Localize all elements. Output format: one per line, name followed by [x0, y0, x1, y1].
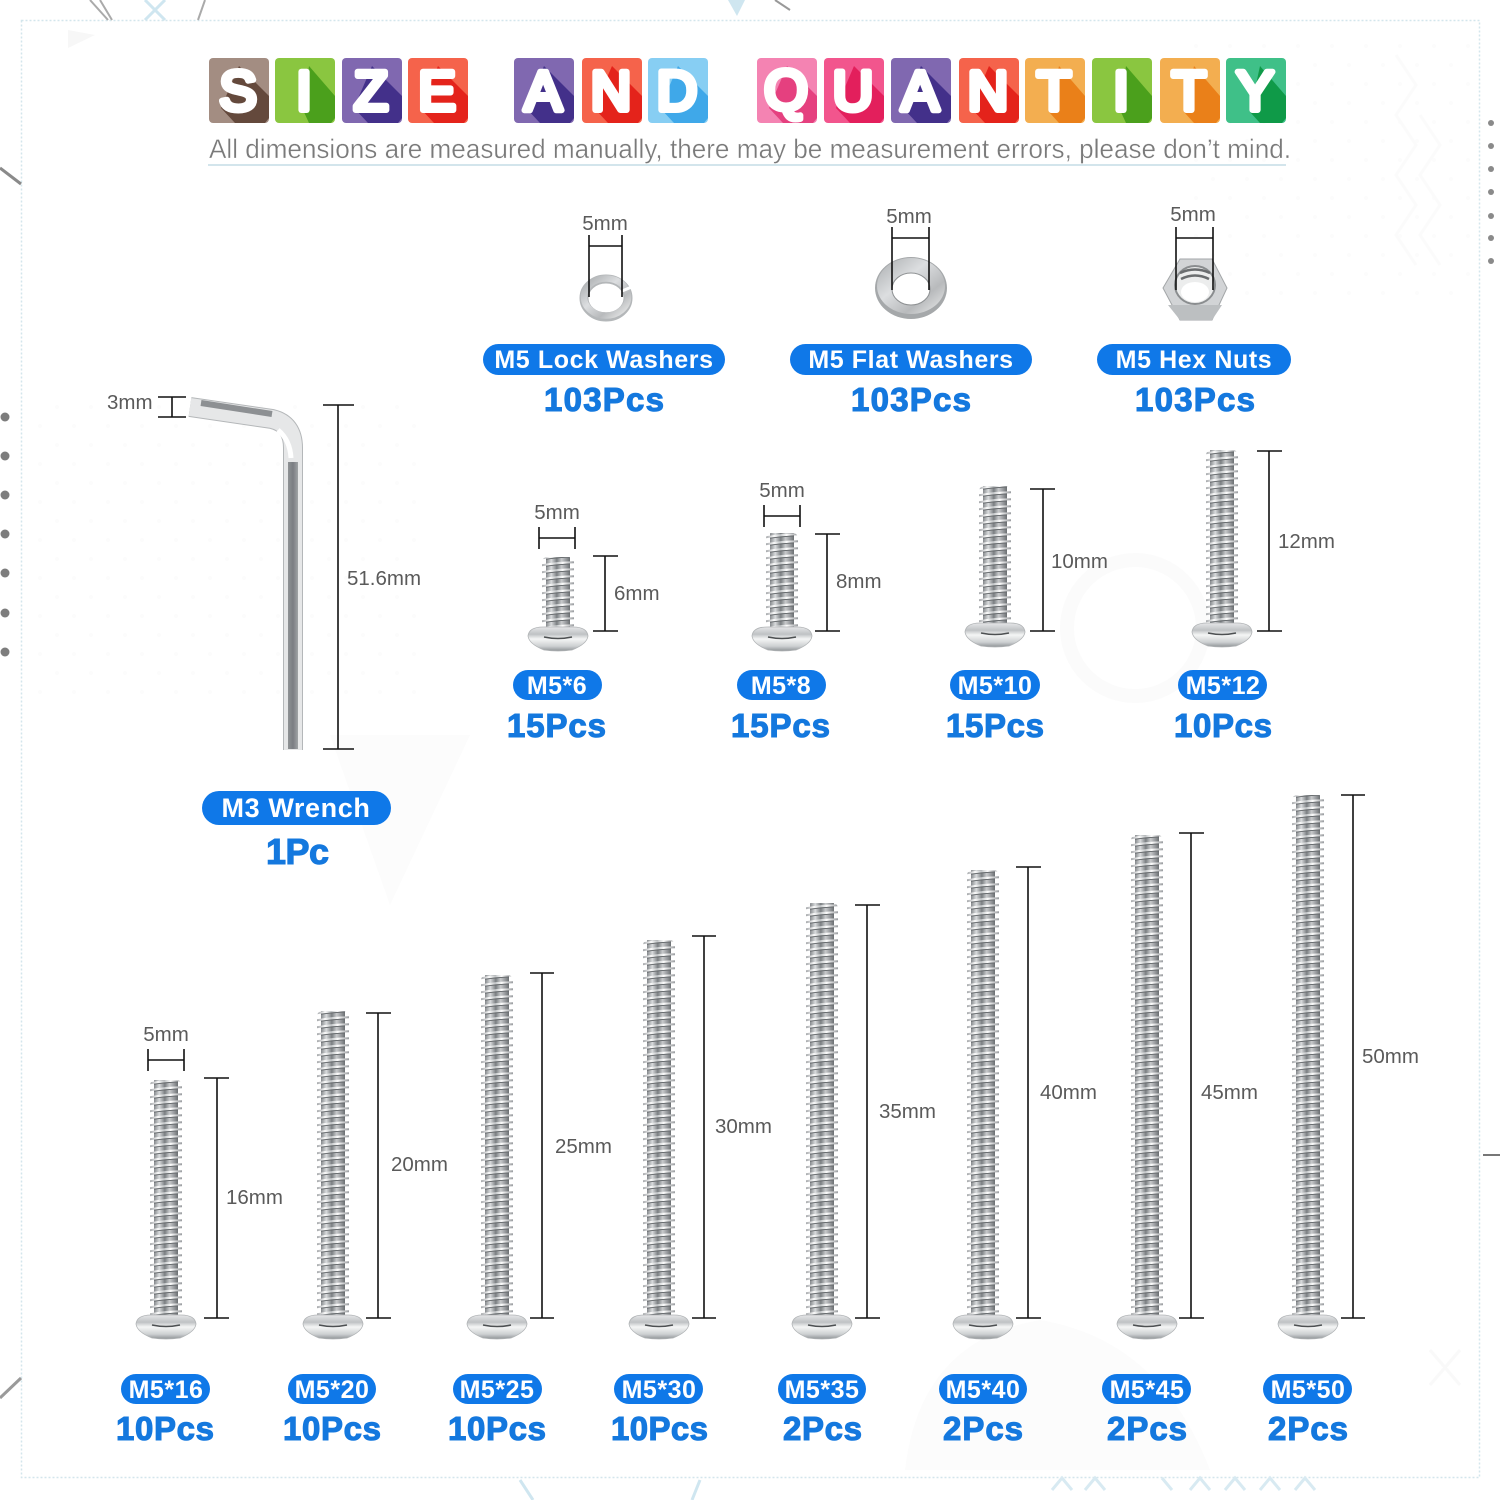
- subtitle note: All dimensions are measured manually, there may be measurement errors, please don’t mind.: [209, 134, 1291, 164]
- dimension: 6mm: [593, 556, 660, 631]
- label pill: M3 Wrench: [222, 793, 370, 823]
- dimension: 35mm: 35mm: [879, 1100, 936, 1123]
- dimension: 30mm: 30mm: [715, 1115, 772, 1138]
- quantity: 10Pcs: [116, 1410, 214, 1447]
- quantity: 15Pcs: [946, 707, 1044, 744]
- dimension: 16mm: 16mm: [226, 1186, 283, 1209]
- dimension: 5mm: [1170, 203, 1216, 290]
- dimension: 20mm: 20mm: [391, 1153, 448, 1176]
- label pill: M5*20: [295, 1376, 369, 1404]
- label pill: M5*50: [1271, 1376, 1345, 1404]
- tile: Z: [342, 58, 402, 123]
- panel: M5*45: [1102, 833, 1258, 1447]
- tile: Q: Q: [764, 58, 808, 121]
- dimension: 5mm width: 5mm: [534, 501, 580, 524]
- label pill: M5*40: [946, 1376, 1020, 1404]
- panel: M5*30: [611, 936, 772, 1447]
- label pill: M5*45: [1110, 1376, 1184, 1404]
- panel: M5*20: [283, 1011, 448, 1447]
- screw: [629, 940, 689, 1339]
- dimension: 35mm: [855, 905, 936, 1318]
- screw: [752, 533, 812, 651]
- icon: hex wrench: [190, 403, 298, 750]
- label pill: M5*30: [622, 1376, 696, 1404]
- screw: [467, 975, 527, 1339]
- panel: M5 flat washers: [790, 205, 1032, 418]
- panel: M5*6: [507, 501, 660, 744]
- tile: U: [824, 58, 884, 123]
- panel: M3 wrench: [107, 391, 421, 872]
- tile: T: [1025, 58, 1085, 123]
- dimension: 10mm: 10mm: [1051, 550, 1108, 573]
- quantity: 2Pcs: [1107, 1410, 1187, 1447]
- tile: I: I: [1113, 59, 1129, 122]
- tile: Y: [1226, 58, 1286, 123]
- tile: S: [209, 58, 269, 123]
- dimension: 12mm: [1257, 451, 1335, 631]
- screw: [1192, 450, 1252, 647]
- dimension: 3mm: 3mm: [107, 391, 153, 414]
- dimension: 40mm: [1016, 867, 1097, 1318]
- tile: I: I: [296, 59, 312, 122]
- quantity: 10Pcs: [448, 1410, 546, 1447]
- dimension: 50mm: [1341, 795, 1419, 1318]
- dimension: 5mm: 5mm: [886, 205, 932, 228]
- tile: D: [648, 58, 708, 123]
- tile: Z: Z: [354, 59, 388, 122]
- screw: [1278, 795, 1338, 1339]
- label pill: [513, 670, 602, 700]
- dimension: 5mm: [582, 212, 628, 297]
- tile: D: D: [657, 59, 697, 122]
- tile: Y: Y: [1236, 59, 1274, 122]
- dimension: 5mm: 5mm: [1170, 203, 1216, 226]
- tile: E: [408, 58, 468, 123]
- dimension: 5mm width: 5mm: [143, 1023, 189, 1046]
- icon: hex nut: [1163, 259, 1227, 320]
- panel: M5*40: [939, 867, 1097, 1447]
- quantity: 2Pcs: [943, 1410, 1023, 1447]
- quantity: 2Pcs: [783, 1410, 862, 1447]
- dimension: 5mm: [886, 205, 932, 290]
- dimension: 30mm: [692, 936, 772, 1318]
- tile: A: [891, 58, 951, 123]
- dimension: 51.6mm: 51.6mm: [347, 567, 421, 590]
- label pill: M5*12: [1186, 672, 1260, 700]
- panel: M5*8: [731, 479, 882, 744]
- dimension: 10mm: [1030, 489, 1108, 631]
- panel: M5 lock washers: [483, 212, 725, 418]
- quantity: 10Pcs: [283, 1410, 381, 1447]
- dimension: 8mm: [815, 534, 882, 631]
- quantity: 103Pcs: [851, 381, 971, 418]
- tile: A: A: [901, 59, 939, 122]
- quantity: 15Pcs: [731, 707, 830, 744]
- dimension: 45mm: [1179, 833, 1258, 1318]
- tile: E: E: [418, 59, 456, 122]
- quantity: 1Pc: [266, 831, 329, 872]
- label pill: M5*25: [460, 1376, 534, 1404]
- panel: M5*50: [1263, 795, 1419, 1447]
- dimension: 50mm: 50mm: [1362, 1045, 1419, 1068]
- tile: A: A: [524, 59, 562, 122]
- title: SIZE AND QUANTITY: [209, 58, 1286, 123]
- tile: T: T: [1172, 59, 1206, 122]
- label pill: M5 Hex Nuts: [1116, 346, 1272, 374]
- screw: [1117, 835, 1177, 1339]
- panel: M5*12: [1174, 450, 1335, 744]
- dimension: 51.6mm: [323, 405, 421, 749]
- dimension: 25mm: 25mm: [555, 1135, 612, 1158]
- dimension: 3mm: [107, 391, 186, 417]
- screw: [965, 486, 1025, 647]
- dimension: 16mm: [204, 1078, 283, 1318]
- panel: M5*35: [778, 903, 936, 1447]
- quantity: 10Pcs: [1174, 707, 1272, 744]
- dimension: 45mm: 45mm: [1201, 1081, 1258, 1104]
- tile: N: [582, 58, 642, 123]
- label pill: M5*6: [527, 672, 587, 700]
- label pill: M5*8: [751, 672, 811, 700]
- dimension: 6mm: 6mm: [614, 582, 660, 605]
- quantity: 10Pcs: [611, 1410, 708, 1447]
- dimension: 20mm: [366, 1013, 448, 1318]
- tile: I: [1092, 58, 1152, 123]
- label pill: M5 Flat Washers: [808, 346, 1014, 374]
- tile: S: S: [219, 59, 257, 122]
- label pill: M5*10: [958, 672, 1032, 700]
- quantity: 103Pcs: [1135, 381, 1255, 418]
- panel: M5*16: [116, 1023, 283, 1447]
- quantity: 2Pcs: [1268, 1410, 1348, 1447]
- dimension: 5mm: 5mm: [582, 212, 628, 235]
- dimension: 5mm width: [534, 501, 580, 549]
- tile: T: T: [1037, 59, 1071, 122]
- dimension: 5mm width: 5mm: [759, 479, 805, 502]
- quantity: 103Pcs: [544, 381, 664, 418]
- dimension: 8mm: 8mm: [836, 570, 882, 593]
- label pill: M5 Lock Washers: [494, 346, 714, 374]
- screw: [303, 1011, 363, 1339]
- label pill: M5*35: [785, 1376, 859, 1404]
- tile: N: [959, 58, 1019, 123]
- dimension: 25mm: [530, 973, 612, 1318]
- quantity: 15Pcs: [507, 707, 606, 744]
- tile: U: U: [833, 59, 873, 122]
- dimension: 12mm: 12mm: [1278, 530, 1335, 553]
- screw: [792, 903, 852, 1339]
- screw: [528, 557, 588, 651]
- screw: [953, 870, 1013, 1339]
- label pill: [737, 670, 826, 700]
- icon: flat washer: [875, 257, 947, 319]
- screw: [136, 1080, 196, 1339]
- panel: M5*25: [448, 973, 612, 1447]
- panel: M5 hex nuts: [1097, 203, 1291, 418]
- panel: M5*10: [946, 486, 1108, 744]
- dimension: 5mm width: [143, 1023, 189, 1071]
- tile: T: [1160, 58, 1220, 123]
- tile: N: N: [968, 59, 1008, 122]
- dimension: 40mm: 40mm: [1040, 1081, 1097, 1104]
- label pill: M5*16: [129, 1376, 203, 1404]
- icon: lock washer: [584, 278, 634, 317]
- label pill: [202, 791, 391, 825]
- tile: N: N: [591, 59, 631, 122]
- tile: A: [514, 58, 574, 123]
- dimension: 5mm width: [759, 479, 805, 527]
- tile: I: [275, 58, 335, 123]
